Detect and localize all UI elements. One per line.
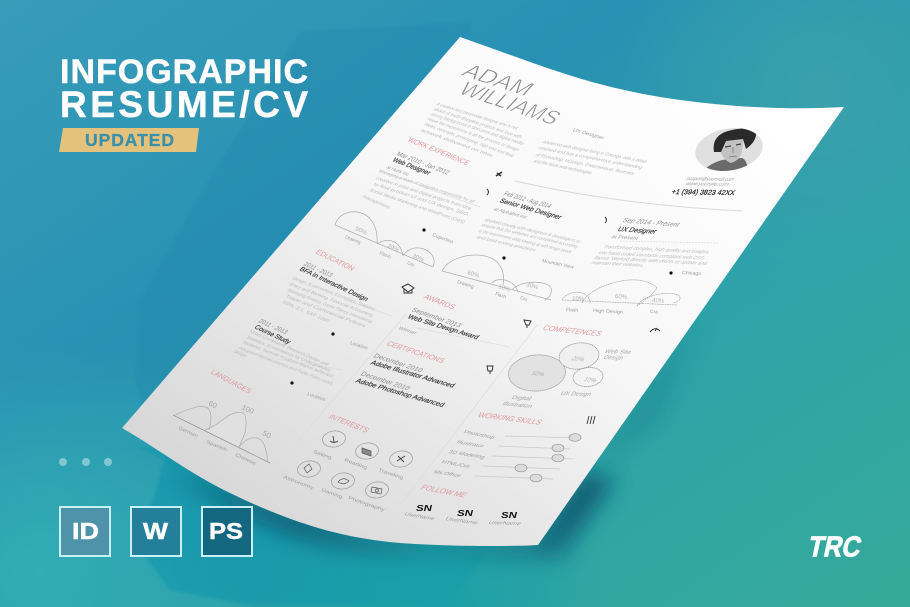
job 2: Feb 2012 - Aug 2014 — [502, 191, 553, 210]
languages chart: 100 — [240, 403, 255, 416]
course study: Course Study — [253, 324, 293, 346]
education: Managing Finance, Game Theory, International — [286, 288, 374, 325]
job 3: at Present — [610, 234, 640, 242]
job 2 skills chart: 30% — [525, 282, 539, 291]
job 2: Worked closely with designers & developers to — [483, 218, 582, 245]
profile text: artwork delivered on time. — [419, 128, 496, 159]
certifications: Adobe Illustrator Advanced — [369, 360, 456, 389]
job 1: Web Designer — [391, 157, 432, 177]
interests grid: Astronomy — [282, 474, 315, 492]
education: Entry and Banking, Financial Accounting, — [288, 282, 376, 319]
awards — [397, 293, 480, 341]
about text: Advanced web designer living in Chicago, with a detail — [541, 140, 648, 165]
resume sheet — [122, 37, 844, 546]
awards: AWARDS — [422, 293, 458, 311]
about text: oriented and has a comprehensive understanding — [537, 146, 644, 171]
job 2 — [475, 191, 582, 255]
job 3: UX Designer — [616, 226, 659, 235]
competences: Web Site — [603, 349, 633, 356]
trophy and badge icons — [487, 320, 531, 374]
working skills — [432, 411, 595, 482]
location: Cupertino: Cupertino — [431, 232, 454, 246]
certifications: December 2010 — [359, 371, 411, 392]
education: Trade and Commercial Policies — [284, 294, 368, 329]
job 1 skills chart — [335, 212, 434, 269]
follow me: FOLLOW ME — [419, 483, 469, 499]
interests grid: Photography — [347, 495, 386, 514]
about text: and the latest web technologies. — [532, 159, 594, 176]
job 1: creative in print and digital projects from idea — [374, 176, 473, 212]
updated badge — [59, 128, 199, 152]
job 3: into hand coded standards compliant web CSS — [597, 250, 706, 261]
format badge: ID: ID — [72, 518, 99, 544]
profile text: afraid of multi-discipline projects and love with — [432, 107, 524, 140]
working skills: WORKING SKILLS — [476, 411, 544, 426]
working skills: Ms Office — [432, 470, 462, 479]
job 2: to the requirements while keeping up with design trends — [477, 229, 574, 255]
profile text: Have the experience in all the process of design — [426, 117, 521, 153]
location: Cupertino — [422, 228, 454, 246]
location: Location (education): Location — [349, 340, 369, 352]
profile text: ideas, concepts, prototyping, high end and final — [423, 122, 515, 159]
interests grid: Reading — [343, 457, 368, 471]
competences: Illustration — [501, 402, 533, 410]
profile text — [419, 102, 525, 159]
profile text: A creative and passionate designer who is not — [435, 102, 520, 131]
main title: RESUME/CV — [60, 84, 308, 125]
job 1: Managing a team of designers responsible for all — [377, 169, 476, 204]
format badge: W: W — [143, 518, 168, 544]
about text: of Photoshop, InDesign, Dreamweaver, Illustrator — [534, 153, 636, 177]
name: WILLIAMS — [453, 78, 567, 129]
competences: 50% — [530, 371, 546, 378]
job 2: and best coding practices — [475, 235, 538, 253]
profile text: strong background in both print and digital media — [429, 112, 525, 147]
job 1 skills chart: 30% — [411, 253, 425, 264]
interests heading: INTERESTS — [327, 413, 371, 434]
contact details: +1 (394) 3823 42XX — [670, 187, 737, 197]
education: 2011 - 2013 — [302, 261, 334, 279]
job title: UX Designer — [571, 128, 606, 141]
job 3: Transformed complex, high quality and insights — [602, 244, 711, 255]
TRC logo: TRC — [806, 531, 864, 563]
job 1: to final product UI and UX design, SEO, — [372, 182, 471, 217]
job 3: Sep 2014 - Present — [621, 217, 681, 229]
location: Mountain View: Mountain View — [542, 258, 575, 271]
location: Chicago: Chicago — [682, 270, 702, 277]
main title — [60, 53, 308, 125]
location: Location (course) — [290, 381, 327, 403]
updated badge: UPDATED — [85, 130, 174, 150]
job 1 skills chart: Flash — [378, 250, 392, 260]
languages chart: 50 — [261, 429, 272, 440]
location: Location (course): Location — [306, 391, 327, 403]
contact details — [670, 176, 737, 197]
follow me: SN — [416, 503, 433, 513]
job 3: layout. Worked directly with clients to update and — [593, 255, 709, 267]
follow me: SN — [501, 510, 518, 520]
working skills: Photoshop — [462, 430, 496, 441]
competences: 10% — [582, 377, 598, 384]
competences: UX Design — [559, 391, 592, 398]
competences: 20% — [570, 356, 586, 363]
job 2 skills chart — [442, 255, 551, 303]
competences: Digital — [510, 395, 532, 402]
awards: Winner — [397, 326, 418, 336]
follow me: SN — [457, 508, 474, 518]
contact details: support@yourmail.com — [685, 176, 736, 183]
job 2: at Alphabet Inc — [492, 207, 529, 221]
job 2 skills chart: 10% — [497, 284, 511, 294]
job 1 skills chart: 20% — [386, 243, 400, 254]
interests grid — [282, 429, 414, 514]
job 2 skills chart: Drawing — [456, 279, 475, 290]
interests grid: Sailing — [312, 449, 333, 461]
pagination dots — [59, 458, 112, 466]
education: Design, Environment, Economics, Statistics — [291, 276, 378, 312]
follow me: UserName — [403, 512, 436, 522]
graduation icon — [402, 284, 414, 293]
format badge: ID — [60, 507, 110, 556]
job 2: Senior Web Designer — [498, 198, 564, 221]
follow me: UserName — [487, 520, 522, 527]
contact details: www.yoursite.com — [684, 181, 731, 188]
certifications: December 2010 — [372, 353, 424, 374]
main title: INFOGRAPHIC — [60, 53, 308, 91]
format badge: PS — [202, 507, 252, 556]
job 1: Social Media Marketing and WordPress (CMS) — [368, 188, 467, 225]
job 1 skills chart: Css — [406, 260, 415, 269]
languages chart: Spanish — [205, 439, 228, 453]
job 3 skills chart: 60% — [615, 294, 628, 301]
certifications: Adobe Photoshop Advanced — [354, 378, 446, 409]
competences — [501, 324, 660, 410]
interests grid: Gaming — [320, 487, 343, 501]
awards: Web Site Design Award — [406, 314, 480, 341]
course study — [232, 318, 336, 387]
job 3 skills chart: Css — [650, 309, 659, 315]
follow me: UserName — [444, 516, 479, 526]
location: Chicago — [669, 270, 702, 277]
timeline icons — [487, 172, 606, 223]
job 3 skills chart: Flash — [566, 307, 579, 314]
competences: Design — [602, 355, 624, 361]
column separators — [270, 170, 718, 505]
job 1: at Hurts Inc — [385, 165, 411, 178]
course study: Students, Seminar in Labour Market behaviour — [241, 340, 336, 379]
job 1: management. — [361, 194, 392, 210]
timeline divider — [515, 181, 743, 211]
format badge: W — [131, 507, 181, 556]
working skills: HTML/Css — [440, 460, 472, 470]
job 1 skills chart: 50% — [354, 226, 368, 237]
awards: September 2013 — [410, 307, 463, 329]
profile photo — [695, 128, 763, 171]
format badge: PS: PS — [209, 518, 243, 544]
course study: Design. — [232, 349, 249, 359]
course study: Noted Coursework: Research Design and — [248, 329, 330, 368]
languages heading: LANGUAGES — [209, 368, 254, 395]
languages chart: 60 — [207, 399, 218, 410]
certifications: CERTIFICATIONS — [385, 339, 447, 365]
job 3: maintain their websites. — [590, 260, 645, 268]
education: BFA in Interactive Design — [298, 266, 370, 303]
working skills: 3D Modeling — [447, 450, 486, 460]
languages chart — [173, 399, 272, 467]
job 2: ensure that the websites are completed according — [480, 223, 579, 250]
certifications — [354, 339, 456, 409]
course study: 2011 - 2013 — [257, 318, 289, 336]
languages chart: Chinese — [234, 452, 257, 467]
job 2 skills chart: 60% — [466, 270, 480, 280]
course study: Advanced Microeconomics and Public Policy notes — [237, 346, 335, 387]
job 3 skills chart: 40% — [652, 298, 665, 305]
job 1: Mar 2010 - Jan 2012 — [395, 151, 451, 176]
job 3 skills chart — [562, 280, 680, 316]
job 1 — [361, 151, 476, 225]
job 3 skills chart: High Design — [593, 308, 624, 316]
education: GPA: 3.1, SAT: 1280 — [281, 300, 331, 324]
job 3 — [590, 217, 711, 268]
interests grid: Traveling — [377, 467, 404, 481]
education: EDUCATION — [314, 248, 357, 272]
education — [281, 248, 378, 329]
job 1 skills chart: Drawing — [344, 234, 362, 246]
work experience heading: WORK EXPERIENCE — [406, 136, 472, 167]
follow me — [403, 483, 522, 527]
languages chart: German — [177, 425, 199, 440]
location: Location (education) — [331, 332, 369, 352]
name: ADAM — [457, 59, 540, 100]
location: Mountain View — [502, 256, 575, 271]
job 2 skills chart: Css — [519, 295, 528, 303]
job 3 skills chart: 10% — [572, 296, 585, 303]
competences: COMPETENCES — [541, 324, 604, 338]
course study: Statistics, Econometrics for Undergraduate — [245, 335, 333, 373]
job 2 skills chart: Flash — [494, 291, 507, 300]
working skills: Illustrator — [455, 440, 486, 449]
about text — [532, 140, 648, 177]
